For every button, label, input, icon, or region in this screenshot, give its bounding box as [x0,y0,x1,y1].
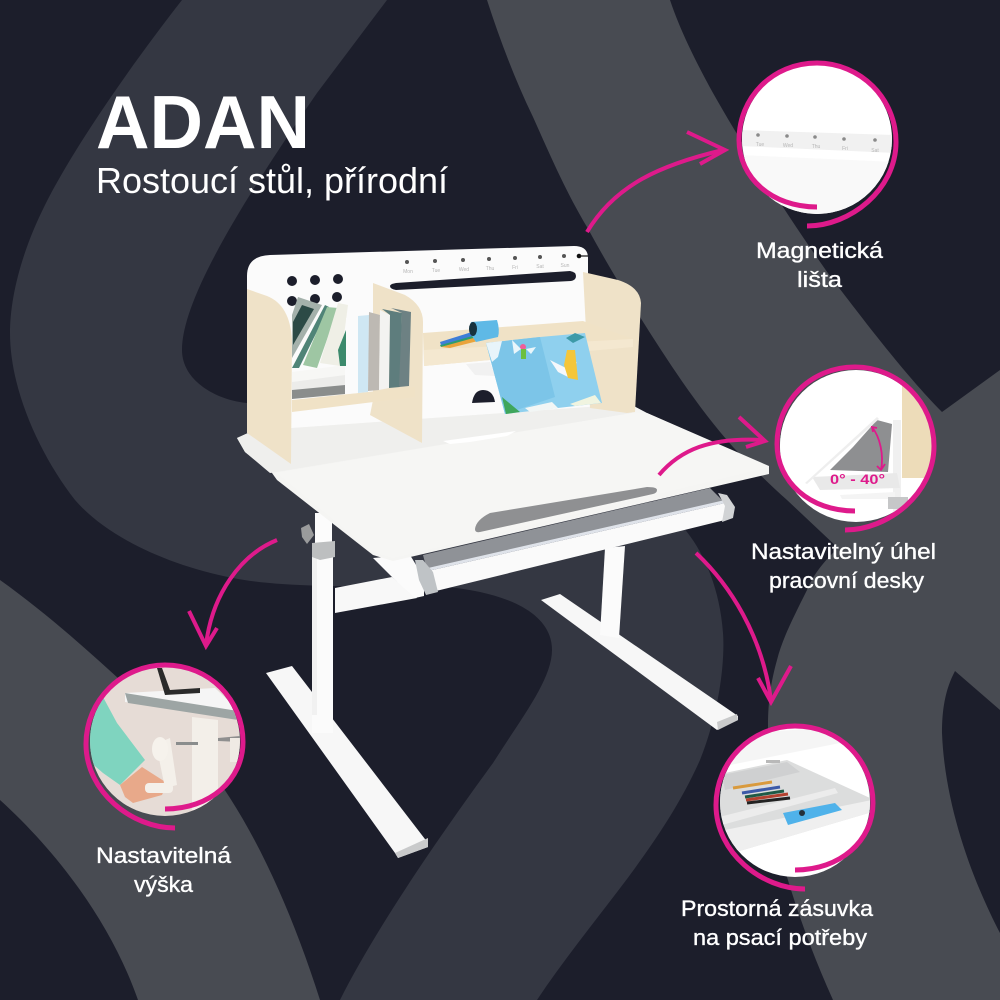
label: drawer: na psací potřeby [693,925,867,950]
magnetic strip photo: Wed [783,143,793,149]
magnetic weekly strip: Wed [459,267,469,273]
magnetic weekly strip: Sun [561,263,570,269]
label: height adjustment [96,843,232,897]
panel: drawer [715,725,880,889]
arrow: to height adjustment [189,540,277,646]
drawer photo [720,728,870,877]
magnetic weekly strip: Thu [486,266,495,272]
label: magnetic strip: Magnetická [756,238,884,263]
shelf unit [247,272,641,464]
crank photo [90,668,240,816]
label: magnetic strip [756,238,884,292]
cable holder [466,362,495,376]
backboard holes [287,271,576,403]
label: tilt angle: Nastavitelný úhel [751,539,936,564]
label: tilt angle: pracovní desky [769,568,924,593]
highlight ring [777,367,934,530]
desk product image [237,246,769,858]
tilt photo [780,370,932,522]
magnetic weekly strip [403,254,588,275]
label: tilt angle [751,539,936,593]
label: height adjustment: Nastavitelná [96,843,232,868]
magnetic strip photo [742,66,892,214]
angle arrow [872,427,885,470]
highlight ring [739,63,896,226]
magnetic weekly strip: Fri [512,265,518,271]
panel: height adjustment [85,665,250,828]
books [292,297,411,399]
magnetic strip photo: Sat [871,148,879,154]
right shelf [583,272,641,413]
arrow: to tilt angle [659,417,765,475]
magnetic strip photo: Tue [756,142,764,148]
open book [486,333,602,414]
label: magnetic strip: lišta [797,267,843,292]
arrow: to drawer [696,553,791,702]
panel: magnetic strip [735,60,900,226]
angle text: 0° - 40° [830,471,885,487]
label: drawer: Prostorná zásuvka [681,896,874,921]
title: ADAN [96,80,310,164]
highlight ring [716,726,873,889]
desk legs and frame [266,513,738,858]
pen cup and pencils [440,320,499,348]
drawer [415,488,735,595]
middle panel [370,283,423,443]
wrist rest [475,487,657,532]
subtitle: Rostoucí stůl, přírodní [96,160,448,201]
backboard [247,246,596,430]
table top [237,404,769,561]
magnetic weekly strip: Mon [403,269,413,275]
magnetic strip photo: Fri [842,146,848,152]
magnetic strip photo: Thu [812,144,821,150]
highlight ring [86,665,243,828]
left panel [247,289,292,464]
magnetic weekly strip: Sat [536,264,544,270]
panel: tilt angle [770,365,940,530]
label: drawer [681,896,874,950]
arrow: to magnetic strip [587,132,725,232]
label: height adjustment: výška [134,872,194,897]
left shelf board [292,387,415,412]
magnetic weekly strip: Tue [432,268,440,274]
